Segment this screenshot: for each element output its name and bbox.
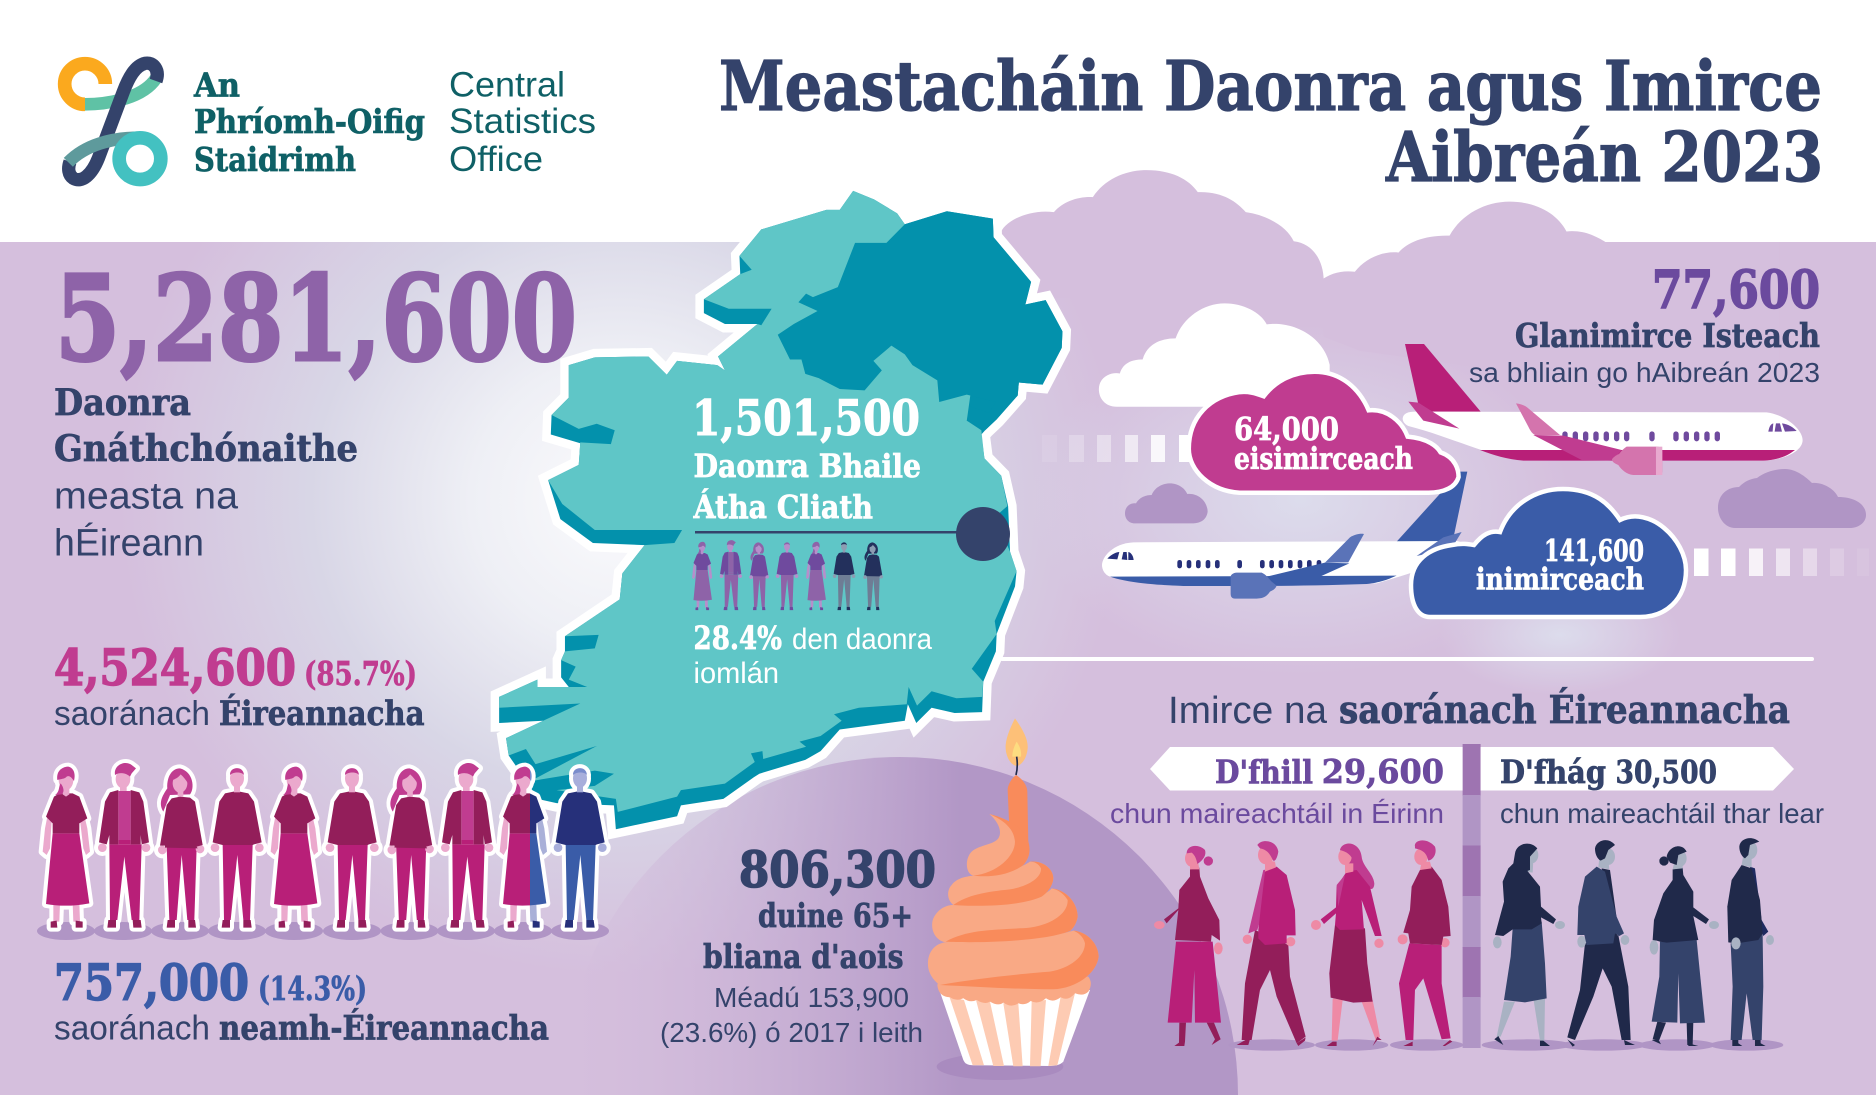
- caption: left: chun maireachtáil thar lear: [1500, 798, 1824, 829]
- walker 6: departing man: [1567, 840, 1635, 1047]
- logo English name: [449, 66, 596, 179]
- cupcake frosting: [928, 814, 1099, 1006]
- map: Northern Ireland: [778, 211, 1062, 430]
- over 65s stat: 806,300: [739, 840, 936, 899]
- dublin people icons: [692, 540, 883, 610]
- walker 2: returning man: [1237, 841, 1306, 1046]
- population label light: [54, 476, 239, 564]
- banner: left: D'fhág: [1500, 753, 1606, 791]
- returned ground shadows: [1228, 1039, 1463, 1051]
- person 5: [271, 767, 318, 928]
- over 65s stat: [660, 840, 936, 1048]
- person 10 blue: [554, 768, 607, 928]
- dublin label: Átha Cliath: [693, 488, 873, 526]
- caption: returned: chun maireachtáil in Éirinn: [1110, 798, 1444, 829]
- dashes: emigrant flight path: [1042, 435, 1192, 462]
- walking people: departed group: [1482, 838, 1783, 1051]
- Irish citizen migration heading: saoránach Éireannacha: [1339, 687, 1790, 732]
- banner: returned: [1150, 747, 1463, 791]
- walker 4: returning man: [1398, 840, 1452, 1046]
- immigrants label: inimirceach: [1476, 562, 1644, 598]
- banner: left: [1481, 747, 1794, 791]
- dublin share of population: den daonra: [792, 623, 932, 656]
- big number: 5,281,600: [55, 249, 577, 388]
- background glow around aeroplanes: [1030, 325, 1570, 675]
- Irish citizen migration heading: Imirce na: [1168, 690, 1328, 732]
- logo English name: Central: [449, 66, 565, 104]
- candle body: [1008, 775, 1028, 843]
- walker 7: departing woman: [1650, 846, 1719, 1046]
- title: [719, 47, 1823, 198]
- Irish citizens stat: 4,524,600: [54, 638, 296, 697]
- walker 5: departing woman: [1493, 844, 1565, 1046]
- people row: citizens split: [37, 763, 609, 940]
- net immigration stat: 77,600: [1652, 260, 1820, 321]
- aeroplane: magenta: [1403, 344, 1803, 475]
- over 65s stat: duine 65+: [758, 896, 913, 935]
- small purple cloud left: [1125, 483, 1208, 523]
- usual resident population total: [54, 249, 577, 564]
- walker 8: departing man: [1727, 838, 1774, 1046]
- cupcake liner: [939, 990, 1090, 1066]
- candle flame: [1006, 718, 1028, 775]
- person 8: [441, 763, 493, 928]
- background band: [0, 242, 1876, 1095]
- population label light: measta na: [54, 476, 239, 518]
- emigrants cloud: [1189, 372, 1459, 493]
- dublin number: 1,501,500: [692, 389, 920, 447]
- centre divider bar: [1463, 744, 1481, 1048]
- walker 1: returning woman: [1154, 846, 1223, 1046]
- logo Irish name: Phríomh-Oifig: [194, 102, 425, 141]
- dublin label: Daonra Bhaile: [694, 447, 921, 485]
- net immigration stat: Glanimirce Isteach: [1515, 316, 1820, 355]
- departed ground shadows: [1482, 1039, 1783, 1051]
- population label light: hÉireann: [54, 522, 204, 564]
- non-Irish citizens stat: neamh-Éireannacha: [219, 1008, 549, 1048]
- person 7: [388, 768, 434, 928]
- over 65s stat: bliana d'aois: [703, 937, 904, 976]
- person 6: [326, 768, 379, 928]
- over 65s stat: (23.6%) ó 2017 i leith: [660, 1017, 923, 1048]
- non-Irish citizens stat: [54, 953, 549, 1048]
- logo Irish name: Staidrimh: [194, 140, 356, 179]
- map top surface: Republic: [499, 191, 1017, 812]
- background glow under immigrant cloud: [1440, 575, 1680, 695]
- emigrants number: 64,000: [1234, 410, 1339, 448]
- logo English name: Office: [449, 140, 543, 179]
- walker 3: returning woman: [1311, 844, 1384, 1046]
- dublin callout: [692, 389, 1010, 690]
- immigrants number: 141,600: [1544, 534, 1644, 569]
- logo Irish name: An: [193, 66, 240, 104]
- person 4: [211, 768, 264, 928]
- dublin label: [693, 447, 921, 526]
- dublin share of population: iomlán: [694, 657, 779, 690]
- population label bold: Gnáthchónaithe: [54, 428, 358, 470]
- net immigration stat: [1469, 260, 1820, 388]
- population label bold: [54, 382, 358, 470]
- non-Irish citizens stat: (14.3%): [258, 969, 367, 1008]
- logo mark: [65, 63, 161, 180]
- Irish citizens stat: (85.7%): [304, 654, 417, 693]
- map depth and white outline: [499, 191, 1062, 829]
- logo Irish name: [193, 66, 425, 179]
- icon: cupcake with candle: [928, 718, 1099, 1080]
- aeroplane: blue: [1102, 472, 1467, 599]
- walking people: returned group: [1154, 840, 1463, 1051]
- person 9 split magenta and blue: [500, 767, 547, 928]
- banner: returned: D'fhill: [1215, 753, 1313, 791]
- net immigration stat: sa bhliain go hAibreán 2023: [1469, 357, 1820, 388]
- divider line: [1000, 657, 1814, 661]
- dublin share of population: 28.4%: [694, 619, 782, 657]
- dashes: immigrant flight path: [1694, 548, 1869, 576]
- population label bold: Daonra: [54, 382, 191, 424]
- logo English name: Statistics: [449, 102, 596, 141]
- logo: Central Statistics Office: [65, 63, 596, 180]
- background glow around map: [0, 242, 1130, 1095]
- banner: left: 30,500: [1616, 753, 1717, 791]
- dome behind cupcake: [562, 757, 1238, 1095]
- over 65s stat: Méadú 153,900: [714, 982, 909, 1013]
- non-Irish citizens stat: 757,000: [54, 953, 249, 1012]
- dublin location marker: [956, 507, 1010, 561]
- emigrants label: eisimirceach: [1234, 442, 1413, 477]
- decorative sky clouds: [1000, 170, 1779, 386]
- non-Irish citizens stat: saoránach: [54, 1010, 210, 1048]
- people ground shadows: [37, 922, 609, 940]
- Irish citizens stat: saoránach: [54, 695, 210, 733]
- Irish citizen migration heading: [1168, 687, 1790, 732]
- Irish citizens stat: Éireannacha: [219, 693, 424, 734]
- person 2: [98, 763, 150, 928]
- person 1: [43, 767, 90, 928]
- small purple cloud right: [1718, 469, 1866, 528]
- dublin pointer line: [695, 531, 965, 534]
- dublin share of population: [694, 619, 932, 690]
- immigrants cloud: [1411, 489, 1686, 617]
- banner: returned: 29,600: [1322, 752, 1444, 791]
- map of Ireland: [499, 191, 1062, 829]
- person 3: [158, 768, 204, 928]
- white cloud: [1099, 303, 1330, 407]
- Irish citizens stat: [54, 638, 424, 734]
